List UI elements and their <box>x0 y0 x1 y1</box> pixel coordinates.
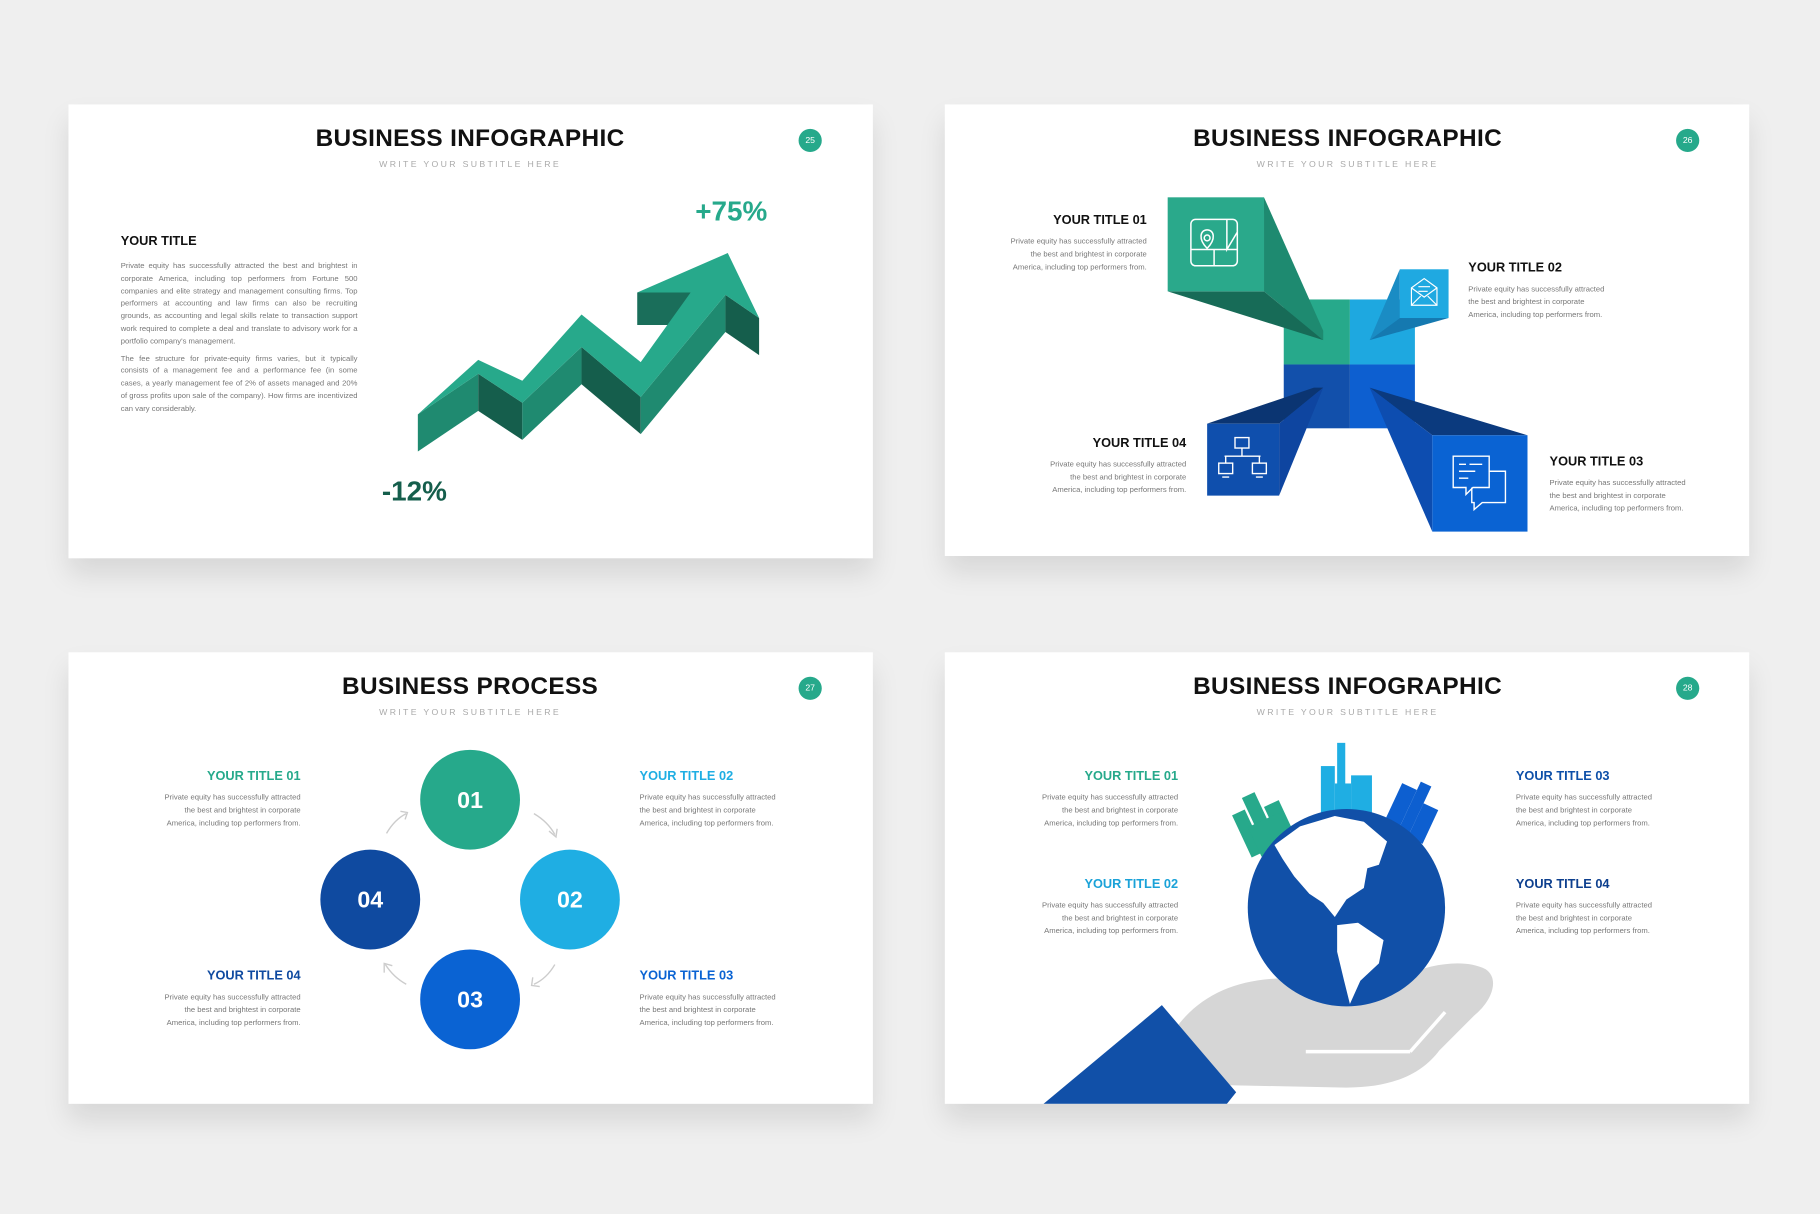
box 02 <box>1370 269 1400 340</box>
text: body 02 <box>640 794 776 827</box>
text: body 01: the best and brightest in corporate <box>1031 250 1147 259</box>
badge: 27 <box>799 677 822 700</box>
text block: Private equity has successfully attracted the best and brightest in corporate America, including top performers from Fortune 500 companies and elite strategy and management consulting firms. Top performers at accounting and law firms can also be recruiting grounds, as accounting and legal skills relate to transaction support work required to complete a deal and translate to advisory work for a portfolio company's management. <box>121 262 357 346</box>
text title: YOUR TITLE <box>121 234 197 248</box>
box 03 <box>1370 388 1527 435</box>
text: body 02: the best and brightest in corporate <box>1062 914 1178 923</box>
text: title 04: YOUR TITLE 04 <box>1516 877 1610 891</box>
text: body 02: the best and brightest in corporate <box>1468 298 1584 306</box>
text: title 04: YOUR TITLE 04 <box>1093 436 1186 450</box>
text: body 02 <box>1468 286 1604 319</box>
text: body 04 <box>164 994 301 1027</box>
panel: business process <box>68 652 873 1104</box>
text: body 04: Private equity has successfully attracted <box>164 994 301 1002</box>
buildings <box>1227 784 1297 861</box>
diagram: cycle circles: 04 <box>357 887 383 913</box>
box 01 <box>1264 197 1323 340</box>
text: body 02: Private equity has successfully attracted <box>1042 902 1178 910</box>
text: body 01: the best and brightest in corporate <box>1062 806 1178 815</box>
text: body 01: the best and brightest in corporate <box>184 806 301 815</box>
text: body 03: America, including top performers from. <box>640 1019 774 1027</box>
text: title 02: YOUR TITLE 02 <box>640 770 733 783</box>
heading: BUSINESS INFOGRAPHIC <box>316 125 625 152</box>
text: body 01 <box>1042 794 1178 827</box>
text: body 04: Private equity has successfully attracted <box>1516 902 1652 910</box>
badge: 25 <box>799 129 822 152</box>
text: body 02 <box>1042 902 1178 935</box>
subtitle: WRITE YOUR SUBTITLE HERE <box>1257 707 1438 717</box>
text: body 02: Private equity has successfully attracted <box>640 794 776 802</box>
text: body 01: America, including top performers from. <box>1013 263 1147 271</box>
text: body 03: America, including top performers from. <box>1550 504 1684 513</box>
text: body 04: the best and brightest in corporate <box>1070 473 1186 481</box>
diagram: cycle circles: 03 <box>457 986 483 1012</box>
text: body 01: Private equity has successfully attracted <box>1011 238 1147 246</box>
text: title 01: YOUR TITLE 01 <box>207 770 301 783</box>
text: body 03 <box>1550 479 1686 513</box>
diagram: 3D cross <box>1168 197 1528 532</box>
sleeve <box>1043 1005 1236 1104</box>
text: body 02: the best and brightest in corporate <box>640 806 756 815</box>
text block <box>120 262 358 413</box>
diagram: cycle circles: 01 <box>457 787 483 813</box>
text: body 04: the best and brightest in corporate <box>184 1006 301 1014</box>
text: title 03: YOUR TITLE 03 <box>1550 455 1643 469</box>
text: title 02: YOUR TITLE 02 <box>1084 877 1178 891</box>
stat: -12%: -12% <box>382 476 447 507</box>
text: body 03: the best and brightest in corporate <box>1516 806 1632 815</box>
badge: 28: 28 <box>1683 682 1693 693</box>
text: body 03: the best and brightest in corporate <box>1550 492 1666 500</box>
text: body 04 <box>1516 902 1652 935</box>
heading: BUSINESS INFOGRAPHIC <box>1193 125 1502 152</box>
badge: 26: 26 <box>1683 135 1693 145</box>
text: body 02: America, including top performers from. <box>640 819 774 827</box>
globe <box>1248 809 1445 1006</box>
hand <box>1172 963 1493 1088</box>
text: body 01: America, including top performers from. <box>1044 819 1178 827</box>
text: body 04: Private equity has successfully attracted <box>1050 461 1186 469</box>
diagram: cycle circles <box>320 750 620 1050</box>
heading: BUSINESS INFOGRAPHIC <box>1193 673 1502 700</box>
text: body 02: Private equity has successfully attracted <box>1468 286 1604 294</box>
box 04 <box>1207 388 1323 424</box>
text: title 01: YOUR TITLE 01 <box>1084 770 1178 783</box>
subtitle: WRITE YOUR SUBTITLE HERE <box>1257 159 1438 169</box>
text: body 03: Private equity has successfully attracted <box>1516 794 1652 802</box>
text: body 01: Private equity has successfully attracted <box>1042 794 1178 802</box>
text: title 03: YOUR TITLE 03 <box>1516 770 1610 783</box>
subtitle: WRITE YOUR SUBTITLE HERE <box>379 707 561 717</box>
badge: 25: 25 <box>805 135 815 145</box>
text: body 02: America, including top performers from. <box>1044 927 1178 935</box>
text: body 04: America, including top performers from. <box>1052 486 1186 494</box>
text: body 03 <box>640 994 776 1027</box>
diagram: cycle circles: 02 <box>557 887 583 913</box>
text: body 04 <box>1050 461 1186 494</box>
text: body 03: the best and brightest in corporate <box>640 1006 756 1014</box>
text: body 01 <box>164 794 301 827</box>
text: body 04: America, including top performers from. <box>1516 927 1650 935</box>
subtitle: WRITE YOUR SUBTITLE HERE <box>379 159 561 169</box>
text: body 01: America, including top performers from. <box>167 819 301 827</box>
text: title 04: YOUR TITLE 04 <box>207 969 301 983</box>
text: body 03: Private equity has successfully attracted <box>1550 479 1686 487</box>
text: title 02: YOUR TITLE 02 <box>1468 261 1562 275</box>
text block: The fee structure for private-equity firms varies, but it typically consists of a management fee and a performance fee (in some cases, a yearly management fee of 2% of assets managed and 20% of gross profits upon sale of the company). How firms are incentivized can vary considerably. <box>121 355 357 413</box>
stat: +75%: +75% <box>695 196 767 227</box>
text: body 03: Private equity has successfully attracted <box>640 994 776 1002</box>
badge: 28 <box>1676 677 1699 700</box>
text: body 04: the best and brightest in corporate <box>1516 914 1632 923</box>
badge: 26 <box>1676 129 1699 152</box>
text: body 01: Private equity has successfully attracted <box>164 794 301 802</box>
text: body 03: America, including top performers from. <box>1516 819 1650 827</box>
text: body 02: America, including top performers from. <box>1468 311 1602 319</box>
text: title 03: YOUR TITLE 03 <box>640 969 733 983</box>
text: body 01 <box>1011 238 1147 271</box>
panel: growth arrow <box>68 104 873 558</box>
chart: zigzag arrow <box>418 253 760 452</box>
text: title 01: YOUR TITLE 01 <box>1053 214 1147 227</box>
text: body 04: America, including top performers from. <box>167 1019 301 1027</box>
panel: globe in hand <box>945 652 1749 1104</box>
illustration: globe in hand <box>1044 742 1493 1104</box>
text: body 03 <box>1516 794 1652 827</box>
badge: 27: 27 <box>805 682 815 693</box>
heading: BUSINESS PROCESS <box>342 673 598 700</box>
panel: four-box cross <box>945 104 1749 556</box>
